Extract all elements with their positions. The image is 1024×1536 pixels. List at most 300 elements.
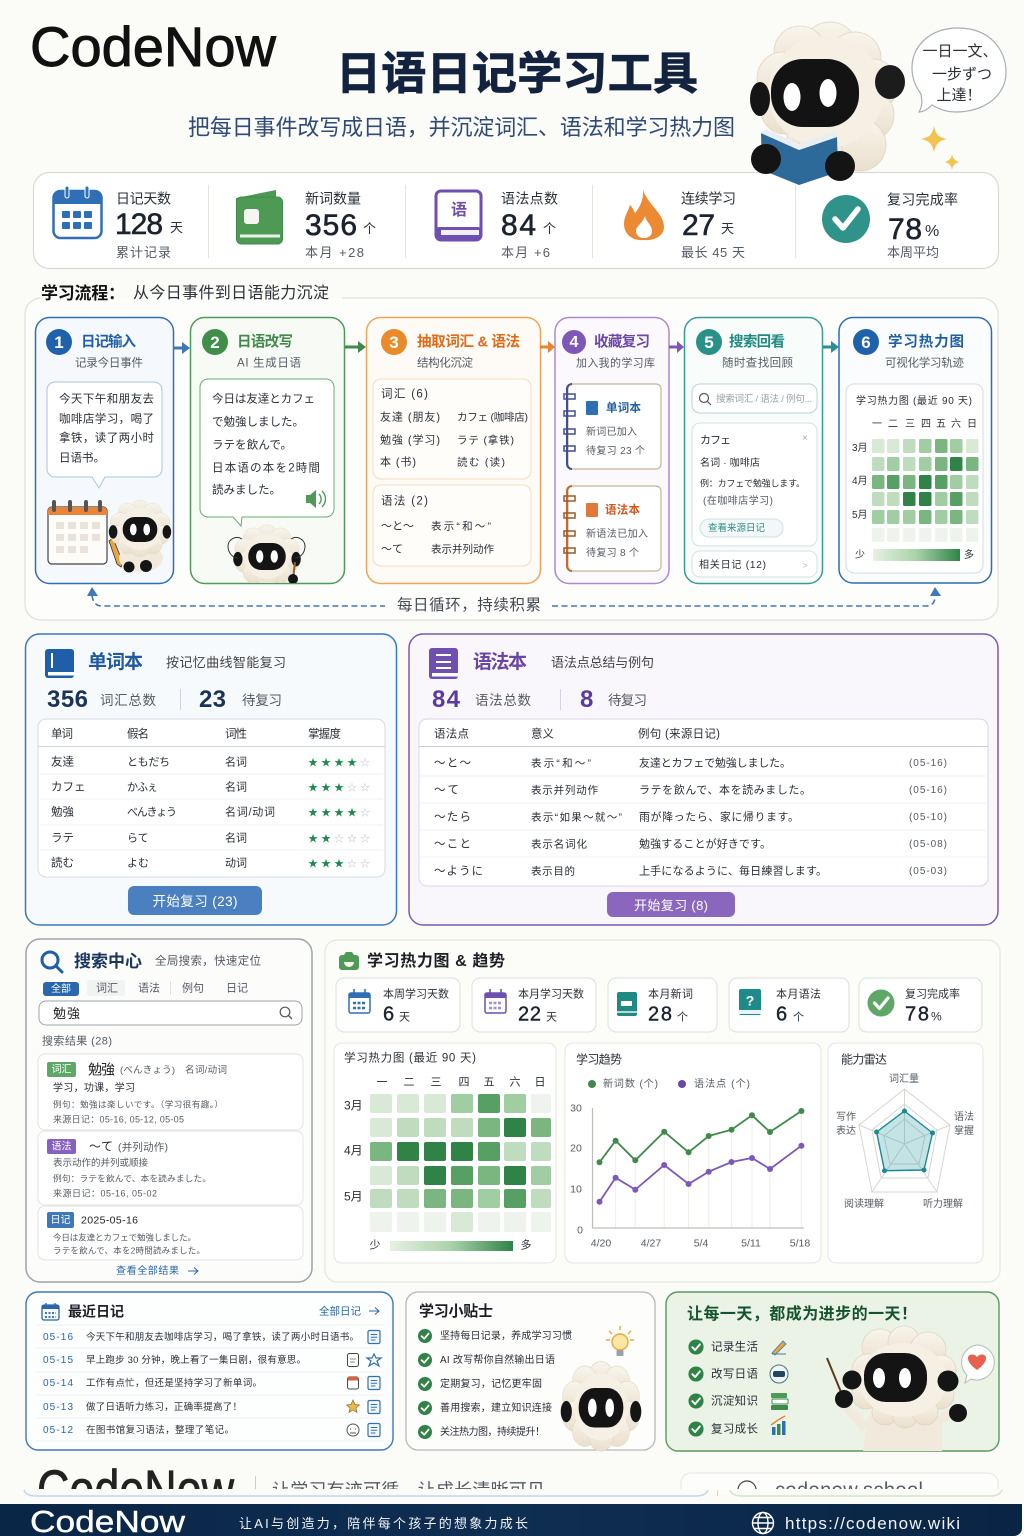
step 1: diary input: 日记输入 [81, 333, 136, 351]
heatmap grid [370, 1094, 551, 1232]
chart: skill radar: 听力理解 [923, 1197, 963, 1210]
button: review grammar: 开始复习 (8) [634, 898, 708, 913]
panel: vocabulary book: 23 [199, 686, 226, 713]
table: vocabulary: べんきょう [127, 806, 177, 819]
table: grammar: ～ように [434, 865, 483, 878]
speech bubble [912, 28, 1006, 112]
series: new words [596, 1108, 804, 1165]
result: grammar: 来源日记：05-16, 05-02 [53, 1189, 157, 1199]
link: view all results: 查看全部结果 [116, 1264, 179, 1277]
step 5: search: × [802, 433, 808, 444]
step 6: heatmap: 6 [861, 333, 871, 352]
chart: heatmap [334, 1043, 556, 1263]
diary rows: 早上跑步 30 分钟，晚上看了一集日剧，很有意思。 [86, 1354, 306, 1366]
panel: study tips: 学习小贴士 [419, 1302, 493, 1320]
chart: learning trend: 20 [570, 1143, 582, 1155]
stat card: completion [859, 978, 982, 1032]
notebook: vocabulary: 待复习 23 个 [586, 444, 645, 457]
step 3: extract: 読む (读) [457, 456, 505, 469]
step 6: heatmap: 日 [967, 419, 977, 430]
diary rows: 今天下午和朋友去咖啡店学习，喝了拿铁，读了两小时日语书。 [86, 1331, 359, 1343]
stat: new words: 356 [305, 209, 357, 242]
stat card: monthly words [608, 978, 717, 1032]
icon: purple book [429, 648, 458, 679]
diary rows: 05-16 [43, 1332, 73, 1343]
table: grammar: ～て [434, 785, 459, 797]
step 5: search: (在咖啡店学习) [703, 494, 773, 507]
arrow: step 5 to 6 [823, 341, 839, 353]
diary rows: 在图书馆复习语法，整理了笔记。 [86, 1424, 234, 1436]
chart: heatmap: 六 [510, 1076, 520, 1089]
result: vocabulary: 来源日记：05-16, 05-12, 05-05 [53, 1115, 184, 1125]
table: vocabulary: カフェ [51, 781, 86, 794]
chart: heatmap: 学习热力图 (最近 90 天) [344, 1051, 476, 1065]
stat card: monthly words: 本月新词 [648, 987, 693, 1001]
diary rows: 工作有点忙，但还是坚持学习了新单词。 [86, 1377, 262, 1389]
step 4: collect: 4 [570, 334, 579, 351]
step 6: heatmap: 可视化学习轨迹 [885, 356, 964, 370]
step 5: search: > [802, 561, 808, 571]
tip list: 定期复习，记忆更牢固 [440, 1377, 542, 1390]
result: diary: 2025-05-16 [81, 1215, 138, 1227]
chart: learning trend: 10 [570, 1184, 582, 1196]
stat: grammar points: 语 [451, 201, 467, 219]
result: grammar: (并列动作) [118, 1141, 168, 1154]
series: grammar points [596, 1143, 804, 1205]
table: vocabulary: 友達 [51, 755, 74, 769]
step 4: collect [555, 318, 669, 584]
step 3: extract: カフェ (咖啡店) [457, 411, 528, 424]
diary rows: 05-12 [43, 1425, 73, 1436]
stat: review completion: 78 [888, 213, 922, 246]
stat: streak: 最长 45 天 [681, 245, 745, 260]
step 5: search: 搜索回看 [729, 333, 785, 351]
search box: 勉強 [53, 1006, 80, 1021]
diary rows: 05-13 [43, 1402, 73, 1413]
step 5: search: 相关日记 (12) [699, 558, 766, 571]
sparkles [921, 126, 959, 170]
stat card: monthly grammar [729, 978, 849, 1032]
table: grammar: 勉強することが好きです。 [639, 837, 771, 851]
panel: search center: 全局搜索，快速定位 [155, 954, 261, 968]
panel: recent diaries: 全部日记 [319, 1305, 362, 1318]
icon: calendar [42, 1303, 59, 1320]
arrow: step 1 to 2 [173, 342, 190, 354]
step 6: heatmap: 5月 [852, 509, 868, 521]
section title: learning flow: 学习流程： [41, 283, 125, 303]
chart: learning trend: 30 [570, 1103, 582, 1115]
result: vocabulary [38, 1054, 303, 1130]
step 3: extract: 3 [389, 333, 399, 352]
ghost footer: clipped logo row: CodeNow [37, 1458, 234, 1521]
step 5: search: 随时查找回顾 [722, 356, 794, 370]
step 6: heatmap: 学习热力图 [888, 333, 964, 351]
step 6: heatmap: 4月 [852, 475, 868, 487]
step 4: collect: 加入我的学习库 [576, 356, 655, 370]
stat: grammar points [436, 191, 558, 260]
speech bubble: 上達！ [936, 87, 982, 104]
diary rows: 做了日语听力练习，正确率提高了！ [86, 1401, 242, 1413]
chart: skill radar: 表达 [836, 1124, 856, 1137]
step 6: heatmap: 学习热力图 (最近 90 天) [856, 394, 972, 407]
stat card: completion: 78 [905, 1004, 929, 1026]
loop arrow: daily cycle [87, 587, 941, 614]
chart: heatmap: 五 [484, 1077, 494, 1089]
button: review vocabulary [128, 886, 262, 915]
panel: vocabulary book: 按记忆曲线智能复习 [166, 655, 286, 670]
stat card: monthly grammar: 6 [776, 1004, 787, 1026]
result: vocabulary: 词汇 [52, 1063, 72, 1076]
step 5: search: 5 [704, 333, 714, 352]
table: grammar: ～と～ [434, 757, 472, 770]
step 6: heatmap: 多 [964, 548, 974, 561]
diary rows: 05-14 [43, 1378, 73, 1389]
chart: learning trend: 学习趋势 [576, 1052, 622, 1067]
loop arrow: daily cycle: 每日循环，持续积累 [397, 596, 541, 614]
table: vocabulary: ★★★☆☆ [308, 781, 370, 795]
step 2: rewrite: AI 生成日语 [237, 356, 302, 370]
table: grammar: 表示“如果～就～” [531, 811, 622, 824]
chart: learning trend: 5/11 [741, 1238, 761, 1250]
tip list: AI 改写帮你自然输出日语 [440, 1353, 555, 1366]
table: vocabulary: かふぇ [127, 781, 158, 794]
checklist [688, 1339, 758, 1437]
table: grammar: 友達とカフェで勉強しました。 [639, 756, 791, 770]
stat card: completion: % [931, 1010, 942, 1024]
table: vocabulary: 名词 [225, 755, 247, 769]
step 2: rewrite [190, 318, 344, 586]
checklist: 沉淀知识 [711, 1394, 758, 1408]
mascot: tips sheep [561, 1361, 641, 1451]
stat: grammar points: 84 [501, 209, 536, 242]
table: grammar: (05-08) [909, 839, 947, 850]
search tabs: 全部 [51, 982, 71, 995]
diary rows: 05-15 [43, 1355, 73, 1366]
link: view all results [116, 1264, 198, 1277]
ghost footer: clipped logo row: 让学习有迹可循，让成长清晰可见 [272, 1481, 545, 1501]
step 2: rewrite: 読みました。 [212, 483, 281, 497]
table: vocabulary: 单词 [51, 728, 73, 741]
notebook: vocabulary: 新词已加入 [586, 425, 637, 438]
step 3: extract: 词汇 (6) [381, 388, 428, 401]
step 3: extract [366, 318, 540, 584]
result: diary: ラテを飲んで、本を2時間読みました。 [53, 1246, 205, 1256]
stat card: monthly grammar: 个 [793, 1011, 804, 1024]
stat: new words: 本月 +28 [305, 245, 364, 260]
table: vocabulary: らて [127, 832, 149, 845]
step 3: extract: ラテ (拿铁) [457, 434, 514, 447]
checklist: 复习成长 [711, 1423, 758, 1436]
mascot: headphone sheep [228, 525, 305, 586]
step 6: heatmap [839, 318, 992, 583]
step 2: rewrite: 日语改写 [237, 334, 293, 351]
chart: skill radar: 能力雷达 [841, 1053, 887, 1067]
tip list: 善用搜索，建立知识连接 [440, 1401, 552, 1414]
ghost footer: clipped logo row: codenow.school [775, 1480, 923, 1502]
panel: grammar book: 84 [432, 686, 461, 713]
result: grammar [38, 1131, 303, 1205]
icon: magnifier [42, 952, 62, 972]
table: grammar: 表示并列动作 [531, 784, 598, 797]
chart: heatmap: 4月 [344, 1144, 363, 1158]
stat: diary days: 累计记录 [116, 245, 171, 260]
search tabs: 例句 [182, 981, 204, 995]
logo: CodeNow: CodeNow [30, 15, 277, 78]
table: grammar: 表示“和～” [531, 757, 592, 770]
panel: grammar book [409, 634, 998, 925]
step 6: heatmap: 3月 [852, 442, 868, 454]
stat card: weekly days: 本周学习天数 [383, 987, 449, 1001]
speech bubble: 一步ずつ [932, 66, 992, 83]
stat card: monthly days: 天 [546, 1012, 557, 1024]
icon: calendar with pencil [48, 500, 123, 567]
step 5: search: カフェ [700, 434, 731, 447]
stat: diary days: 128 [115, 208, 163, 241]
table: vocabulary: 动词 [225, 857, 247, 870]
step 3: extract: 勉強 (学习) [380, 433, 440, 447]
result: vocabulary: 例句：勉強は楽しいです。（学习很有趣。） [53, 1100, 223, 1110]
stat card: monthly days [472, 978, 596, 1032]
result: grammar: 表示动作的并列或顺接 [53, 1157, 148, 1169]
table: grammar: 语法点 [434, 727, 469, 741]
step 5: search: 名词 · 咖啡店 [700, 456, 760, 469]
tip list: 坚持每日记录，养成学习习惯 [440, 1329, 572, 1342]
result: diary [38, 1206, 303, 1260]
step 1: diary input: 今天下午和朋友去 [59, 392, 154, 406]
table: vocabulary: 词性 [225, 727, 247, 741]
tip list [418, 1329, 572, 1439]
step 1: diary input: 1 [54, 333, 64, 352]
chart: heatmap: 三 [430, 1077, 442, 1089]
step 1: diary input: 记录今日事件 [75, 356, 143, 370]
speech bubble: 一日一文、 [922, 43, 998, 60]
step 6: heatmap: 四 [921, 419, 931, 430]
result: grammar: 例句：ラテを飲んで、本を読みました。 [53, 1173, 211, 1184]
icon: light bulb [606, 1326, 634, 1356]
stat: review completion: 复习完成率 [887, 192, 958, 208]
chart: heatmap: 一 [376, 1077, 388, 1089]
stat: diary days: 天 [170, 220, 183, 235]
table: grammar: (05-03) [909, 866, 947, 877]
table: vocabulary: 名词 [225, 780, 247, 794]
stat card: monthly days: 22 [518, 1004, 541, 1026]
icon: green chart badge [339, 952, 359, 970]
panel: vocabulary book: 单词本 [88, 651, 143, 673]
table: vocabulary: 名词 [225, 831, 247, 845]
arrow: step 4 to 5 [669, 341, 684, 353]
step 6: heatmap: 三 [905, 419, 915, 430]
stat card: monthly grammar: ? [746, 993, 754, 1009]
stat: streak: 连续学习 [681, 191, 736, 207]
stat: new words [236, 190, 376, 260]
icon: globe [752, 1512, 774, 1534]
result: vocabulary: 学习，功课，学习 [53, 1081, 135, 1094]
panel: recent diaries: 最近日记 [68, 1304, 124, 1320]
step 3: extract: 本 (书) [380, 455, 416, 469]
chart: learning trend [565, 1043, 821, 1263]
stat: new words: 新词数量 [305, 191, 361, 207]
search tabs: 词汇 [96, 982, 118, 995]
step 6: heatmap: 二 [888, 419, 898, 430]
table: grammar: ～こと [434, 838, 471, 851]
table: vocabulary: ともだち [127, 756, 170, 769]
stat: review completion: % [925, 223, 939, 240]
arrow: step 2 to 3 [345, 341, 366, 353]
chart: heatmap: 3月 [344, 1099, 363, 1113]
chart: learning trend: 0 [577, 1225, 583, 1237]
search tabs [43, 980, 248, 996]
table: grammar [419, 719, 988, 886]
diary rows [43, 1330, 381, 1436]
step 5: search: 例：カフェで勉強します。 [700, 478, 805, 489]
step 1: diary input: 咖啡店学习，喝了 [59, 412, 154, 426]
panel: study tips [406, 1292, 655, 1451]
stat: new words: 个 [363, 221, 376, 236]
table: grammar: (05-16) [909, 785, 947, 796]
table: vocabulary: ラテ [51, 833, 74, 845]
panel: heatmap and trends [325, 940, 1000, 1282]
table: grammar: (05-16) [909, 758, 947, 769]
stat card: monthly words: 28 [648, 1004, 672, 1026]
panel: vocabulary book: 词汇总数 [100, 693, 156, 708]
stat card: monthly days: 本月学习天数 [518, 987, 584, 1001]
table: vocabulary: 掌握度 [308, 727, 342, 741]
step 3: extract: ～て [381, 544, 403, 556]
arrow: step 3 to 4 [540, 341, 555, 353]
section title: learning flow [41, 283, 329, 303]
icon: speaker [306, 490, 325, 508]
notebook: grammar [564, 486, 661, 571]
panel: grammar book: 语法总数 [475, 693, 532, 708]
icons: activities [770, 1341, 788, 1435]
chart: heatmap: 四 [458, 1077, 470, 1089]
stat: diary days: 日记天数 [116, 191, 171, 207]
step 2: rewrite: 日本语の本を2時間 [212, 461, 320, 475]
step 2: rewrite: で勉強しました。 [212, 415, 304, 429]
step 3: extract: ～と～ [381, 520, 414, 533]
panel: grammar book: 8 [580, 686, 593, 713]
notebook: grammar: 待复习 8 个 [586, 546, 639, 559]
step 3: extract: 语法 (2) [381, 494, 428, 508]
panel: stats [34, 172, 998, 268]
section title: learning flow: 从今日事件到日语能力沉淀 [133, 284, 329, 302]
step 3: extract: 表示并列动作 [431, 543, 494, 556]
chart: heatmap: 5月 [344, 1190, 363, 1204]
step 4: collect: 收藏复习 [594, 334, 650, 351]
table: vocabulary: ★★☆☆☆ [308, 832, 370, 846]
table: vocabulary: ★★★★☆ [308, 806, 370, 820]
step 5: search: 查看来源日记 [708, 522, 765, 534]
chart: learning trend: 4/27 [641, 1238, 661, 1250]
table: grammar: 雨が降ったら、家に帰ります。 [639, 810, 799, 824]
result: vocabulary: (べんきょう) [120, 1065, 175, 1076]
table: grammar: (05-10) [909, 812, 947, 823]
step 1: diary input: 日语书。 [59, 452, 105, 465]
step 6: heatmap: 五 [936, 419, 946, 430]
step 5: search [684, 318, 822, 584]
chart: skill radar: 写作 [836, 1111, 856, 1123]
stat: streak [624, 189, 745, 260]
table: vocabulary: 勉強 [51, 805, 74, 819]
step 6: heatmap: 六 [951, 418, 961, 430]
mascot: writing sheep [109, 500, 171, 572]
checklist: 记录生活 [711, 1340, 758, 1354]
step 1: diary input: 拿铁，读了两小时 [59, 431, 154, 445]
table: vocabulary: 読む [51, 856, 74, 870]
stat card: monthly words: 个 [677, 1011, 688, 1024]
step 3: extract: 抽取词汇 & 语法 [417, 333, 520, 351]
step 2: rewrite: ラテを飲んで。 [212, 438, 292, 452]
panel: learning flow [25, 298, 998, 620]
stat card: weekly days [336, 978, 460, 1032]
panel: grammar book: 语法本 [473, 651, 527, 673]
title: 日语日记学习工具 [336, 48, 698, 99]
chart: skill radar: 掌握 [954, 1124, 974, 1137]
stat: diary days [53, 186, 183, 260]
step 3: extract: 表示“和～” [431, 520, 492, 533]
stat card: weekly days: 6 [383, 1004, 394, 1026]
notebook: vocabulary: 单词本 [606, 401, 642, 415]
step 3: extract: 结构化沉淀 [417, 356, 474, 370]
notebook: grammar: 语法本 [605, 503, 640, 517]
ghost footer: clipped logo row [39, 1468, 998, 1489]
stat: review completion: 本周平均 [887, 245, 939, 260]
chart: heatmap: 二 [404, 1077, 414, 1089]
panel: motivation [666, 1292, 999, 1451]
panel: vocabulary book: 356 [47, 686, 88, 713]
chart: skill radar: 阅读理解 [844, 1197, 884, 1210]
footer bar: https://codenow.wiki [785, 1514, 960, 1533]
stat: streak: 天 [721, 221, 734, 236]
panel: heatmap and trends: 学习热力图 & 趋势 [367, 951, 505, 970]
result: vocabulary: 勉強 [88, 1062, 115, 1078]
stat card: weekly days: 天 [399, 1012, 410, 1024]
table: vocabulary: 假名 [127, 727, 149, 741]
panel: search center: 搜索中心 [74, 952, 142, 971]
panel: search center [26, 939, 312, 1282]
footer bar [0, 1504, 1022, 1536]
icon: heart bubble [962, 1345, 994, 1383]
chart: learning trend: 语法点 (个) [694, 1077, 750, 1090]
button: review vocabulary: 开始复习 (23) [152, 893, 238, 909]
panel: grammar book: 待复习 [608, 692, 647, 708]
chart: skill radar [828, 1043, 983, 1263]
chart: learning trend: 5/18 [790, 1238, 810, 1250]
mascot: reading sheep [750, 22, 905, 185]
mini heatmap grid [872, 439, 978, 542]
table: grammar: ～たら [434, 811, 471, 824]
stat: grammar points: 本月 +6 [501, 245, 550, 260]
checklist: 改写日语 [711, 1367, 758, 1381]
ghost footer: outline strip [0, 1489, 1024, 1504]
chart: heatmap: 日 [534, 1077, 546, 1089]
notebook: grammar: 新语法已加入 [586, 527, 648, 540]
panel: grammar book: 语法点总结与例句 [551, 655, 654, 670]
chart: learning trend: 新词数 (个) [603, 1077, 658, 1090]
table: vocabulary [38, 719, 385, 877]
subtitle: 把每日事件改写成日语，并沉淀词汇、语法和学习热力图 [188, 115, 735, 140]
step 6: heatmap: 少 [855, 549, 865, 561]
result: vocabulary: 名词/动词 [185, 1064, 227, 1076]
table: grammar: 意义 [531, 727, 554, 741]
stat: grammar points: 语法点数 [501, 191, 558, 207]
stat card: monthly grammar: 本月语法 [776, 987, 821, 1001]
panel: motivation: 让每一天，都成为进步的一天！ [687, 1304, 917, 1323]
table: grammar: 表示名词化 [531, 838, 588, 851]
table: vocabulary: ★★★☆☆ [308, 857, 370, 871]
table: grammar: 例句 (来源日记) [638, 727, 720, 741]
result: diary: 今日は友達とカフェで勉強しました。 [53, 1233, 196, 1243]
